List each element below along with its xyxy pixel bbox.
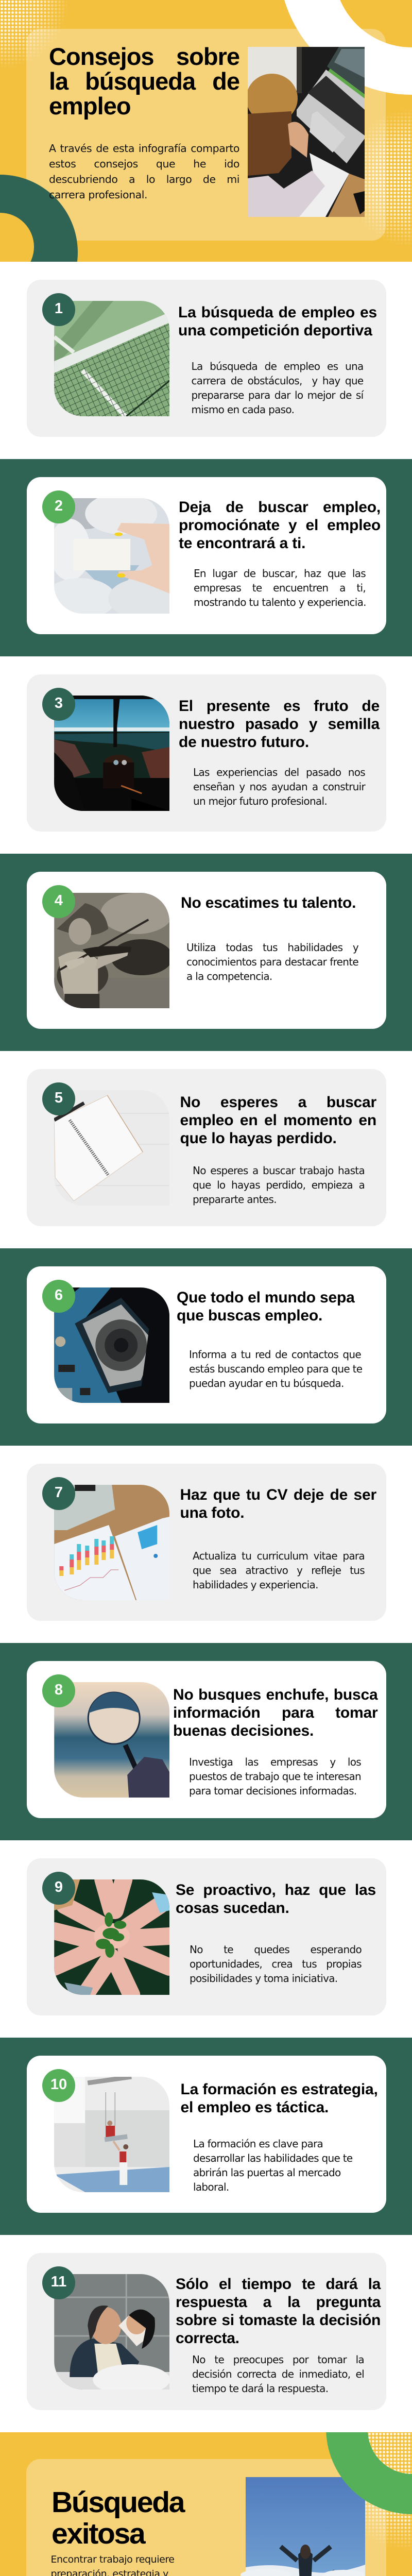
band: tip 2 bbox=[0, 459, 412, 656]
text: tiempo te dará la respuesta. bbox=[192, 2382, 328, 2395]
heading: respuesta a la pregunta bbox=[176, 2294, 381, 2311]
badge 8 bbox=[42, 1674, 75, 1707]
heading: No busques enchufe, busca bbox=[173, 1686, 378, 1703]
title bbox=[49, 43, 239, 120]
text: En lugar de buscar, haz que las bbox=[194, 567, 366, 580]
heading: correcta. bbox=[176, 2330, 239, 2347]
heading bbox=[179, 698, 380, 751]
panel: tip 9 bbox=[27, 1858, 386, 2015]
text: Investiga las empresas y los bbox=[189, 1756, 361, 1768]
text: puestos de trabajo que te interesan bbox=[189, 1770, 361, 1783]
panel: tip 7 bbox=[27, 1464, 386, 1621]
heading: que buscas empleo. bbox=[177, 1307, 322, 1324]
badge 3 bbox=[42, 688, 75, 721]
badge 11: 11 bbox=[51, 2274, 66, 2290]
text bbox=[190, 1943, 362, 1985]
panel: tip 4 bbox=[27, 872, 386, 1029]
text: habilidades y experiencia. bbox=[193, 1579, 318, 1591]
text: mostrando tu talento y experiencia. bbox=[194, 596, 366, 608]
photo: gymnasts in a gym bbox=[54, 2077, 169, 2192]
heading: que lo hayas perdido. bbox=[180, 1130, 337, 1147]
heading: nuestro pasado y semilla bbox=[179, 716, 380, 733]
text bbox=[193, 766, 366, 807]
heading bbox=[179, 499, 381, 552]
heading bbox=[180, 2081, 378, 2116]
heading: sobre si tomaste la decisión bbox=[176, 2312, 381, 2329]
badge 3: 3 bbox=[55, 695, 63, 711]
photo: hands holding a plant bbox=[54, 1879, 169, 1995]
text bbox=[189, 1348, 362, 1389]
closing title: exitosa bbox=[52, 2517, 144, 2550]
text: para tomar decisiones informadas. bbox=[189, 1785, 356, 1797]
heading bbox=[180, 1486, 376, 1521]
closing section bbox=[0, 2432, 412, 2576]
badge 6: 6 bbox=[55, 1287, 63, 1303]
panel: tip 1 bbox=[27, 280, 386, 437]
badge 1 bbox=[42, 293, 75, 326]
text: No te preocupes por tomar la bbox=[192, 2353, 364, 2366]
text: que lo hayas perdido, empieza a bbox=[193, 1179, 365, 1191]
badge 7 bbox=[42, 1477, 75, 1510]
badge 5 bbox=[42, 1082, 75, 1115]
badge 4 bbox=[42, 885, 75, 918]
heading: el empleo es táctica. bbox=[180, 2099, 329, 2116]
text bbox=[192, 2353, 364, 2395]
heading bbox=[177, 1289, 355, 1324]
panel: tip 8 bbox=[27, 1661, 386, 1818]
badge 6 bbox=[42, 1280, 75, 1313]
photo: grandmother and child bbox=[54, 2274, 169, 2389]
text: mismo en cada paso. bbox=[192, 403, 294, 416]
panel: tip 6 bbox=[27, 1266, 386, 1423]
heading: cosas sucedan. bbox=[176, 1900, 289, 1917]
badge 9: 9 bbox=[55, 1879, 63, 1895]
text: que sea atractivo y refleje tus bbox=[193, 1564, 365, 1577]
closing text: Encontrar trabajo requiere bbox=[50, 2554, 175, 2565]
heading: Haz que tu CV deje de ser bbox=[180, 1486, 376, 1503]
text: No esperes a buscar trabajo hasta bbox=[193, 1164, 365, 1177]
text: abrirán las puertas al mercado bbox=[193, 2166, 341, 2179]
text: laboral. bbox=[193, 2181, 229, 2193]
closing text bbox=[50, 2554, 175, 2576]
heading: El presente es fruto de bbox=[179, 698, 380, 715]
badge 7: 7 bbox=[55, 1484, 63, 1501]
text bbox=[186, 941, 358, 982]
text: estás buscando empleo para que te bbox=[189, 1363, 362, 1375]
text: carrera de obstáculos, y hay que bbox=[192, 375, 364, 387]
photo: woman with head in hands at laptop bbox=[248, 47, 365, 217]
heading: La formación es estrategia, bbox=[180, 2081, 378, 2098]
heading bbox=[176, 2276, 381, 2347]
photo: hand holding blank card bbox=[54, 498, 169, 614]
text: desarrollar las habilidades que te bbox=[193, 2152, 353, 2164]
heading: Deja de buscar empleo, bbox=[179, 499, 381, 516]
badge 4: 4 bbox=[55, 892, 63, 909]
text: prepararse para dar lo mejor de sí bbox=[192, 389, 364, 401]
badge 2 bbox=[42, 490, 75, 523]
text: conocimientos para destacar frente bbox=[186, 956, 358, 968]
text: Utiliza todas tus habilidades y bbox=[186, 941, 358, 954]
closing title bbox=[52, 2486, 185, 2550]
intro text: descubriendo a lo largo de mi bbox=[49, 173, 239, 185]
heading: Que todo el mundo sepa bbox=[177, 1289, 355, 1306]
badge 8: 8 bbox=[55, 1682, 63, 1698]
badge 9 bbox=[42, 1872, 75, 1905]
heading: buenas decisiones. bbox=[173, 1722, 314, 1739]
text: oportunidades, crea tus propias bbox=[190, 1958, 362, 1970]
text: enseñan y nos ayudan a construir bbox=[193, 781, 365, 793]
panel: tip 10 bbox=[27, 2056, 386, 2213]
text: Informa a tu red de contactos que bbox=[189, 1348, 361, 1361]
title: Consejos sobre bbox=[49, 43, 239, 70]
heading: Se proactivo, haz que las bbox=[176, 1882, 376, 1899]
badge 1: 1 bbox=[55, 300, 63, 317]
text bbox=[193, 2138, 353, 2193]
panel: tip 2 bbox=[27, 477, 386, 634]
heading: Sólo el tiempo te dará la bbox=[176, 2276, 381, 2293]
heading: No esperes a buscar bbox=[180, 1094, 376, 1111]
photo: camera module on circuit board bbox=[54, 1287, 169, 1403]
heading: información para tomar bbox=[173, 1704, 378, 1721]
text: La búsqueda de empleo es una bbox=[192, 360, 364, 372]
text bbox=[194, 567, 366, 608]
hero section bbox=[0, 0, 412, 262]
heading bbox=[176, 1882, 376, 1917]
intro text: carrera profesional. bbox=[49, 189, 147, 201]
heading bbox=[173, 1686, 378, 1739]
band: tip 8 bbox=[0, 1643, 412, 1840]
heading: te encontrará a ti. bbox=[179, 535, 305, 552]
text bbox=[192, 360, 364, 416]
text: decisión correcta de inmediato, el bbox=[192, 2368, 364, 2380]
band: tip 4 bbox=[0, 854, 412, 1051]
heading: empleo en el momento en bbox=[180, 1112, 376, 1129]
text: No te quedes esperando bbox=[190, 1943, 362, 1956]
band: tip 10 bbox=[0, 2038, 412, 2235]
heading bbox=[178, 304, 377, 339]
badge 2: 2 bbox=[55, 498, 63, 514]
text: Actualiza tu curriculum vitae para bbox=[193, 1550, 365, 1562]
text: La formación es clave para bbox=[193, 2138, 323, 2150]
photo: helicopter cockpit view bbox=[54, 696, 169, 811]
photo: tennis net bbox=[54, 301, 169, 416]
band: tip 6 bbox=[0, 1248, 412, 1446]
heading bbox=[180, 1094, 376, 1147]
text bbox=[193, 1164, 365, 1206]
text: Las experiencias del pasado nos bbox=[193, 766, 365, 778]
text: prepararte antes. bbox=[193, 1193, 277, 1206]
intro text: A través de esta infografía comparto bbox=[49, 142, 239, 155]
heading: una foto. bbox=[180, 1504, 244, 1521]
intro text bbox=[49, 142, 239, 201]
title: empleo bbox=[49, 92, 131, 120]
closing background, photo and arc bbox=[0, 2432, 412, 2576]
badge 10: 10 bbox=[50, 2076, 67, 2093]
photo: boy playing violin bbox=[54, 893, 169, 1008]
text: posibilidades y toma iniciativa. bbox=[190, 1972, 337, 1985]
heading: de nuestro futuro. bbox=[179, 734, 309, 751]
photo: magnifying glass bbox=[54, 1682, 169, 1798]
text bbox=[189, 1756, 361, 1797]
heading: una competición deportiva bbox=[178, 322, 372, 339]
badge 11 bbox=[42, 2266, 75, 2299]
title: la búsqueda de bbox=[49, 67, 239, 95]
photo: charts and papers on wooden desk bbox=[54, 1485, 169, 1600]
panel: tip 5 bbox=[27, 1069, 386, 1226]
badge 10 bbox=[42, 2069, 75, 2102]
text bbox=[193, 1550, 365, 1591]
heading: No escatimes tu talento. bbox=[181, 894, 356, 911]
panel: tip 3 bbox=[27, 674, 386, 832]
intro text: estos consejos que he ido bbox=[49, 158, 239, 170]
text: empresas te encuentren a ti, bbox=[194, 582, 366, 594]
heading: La búsqueda de empleo es bbox=[178, 304, 377, 321]
text: un mejor futuro profesional. bbox=[193, 795, 327, 807]
badge 5: 5 bbox=[55, 1090, 63, 1106]
hero background shapes bbox=[0, 0, 412, 262]
text: a la competencia. bbox=[186, 970, 272, 982]
text: puedan ayudar en tu búsqueda. bbox=[189, 1377, 344, 1389]
photo: spiral notebook bbox=[54, 1095, 169, 1201]
closing title: Búsqueda bbox=[52, 2486, 184, 2519]
photo: person on mountain walkway bbox=[241, 2477, 365, 2576]
panel: tip 11 bbox=[27, 2253, 386, 2410]
heading: promociónate y el empleo bbox=[179, 517, 381, 534]
